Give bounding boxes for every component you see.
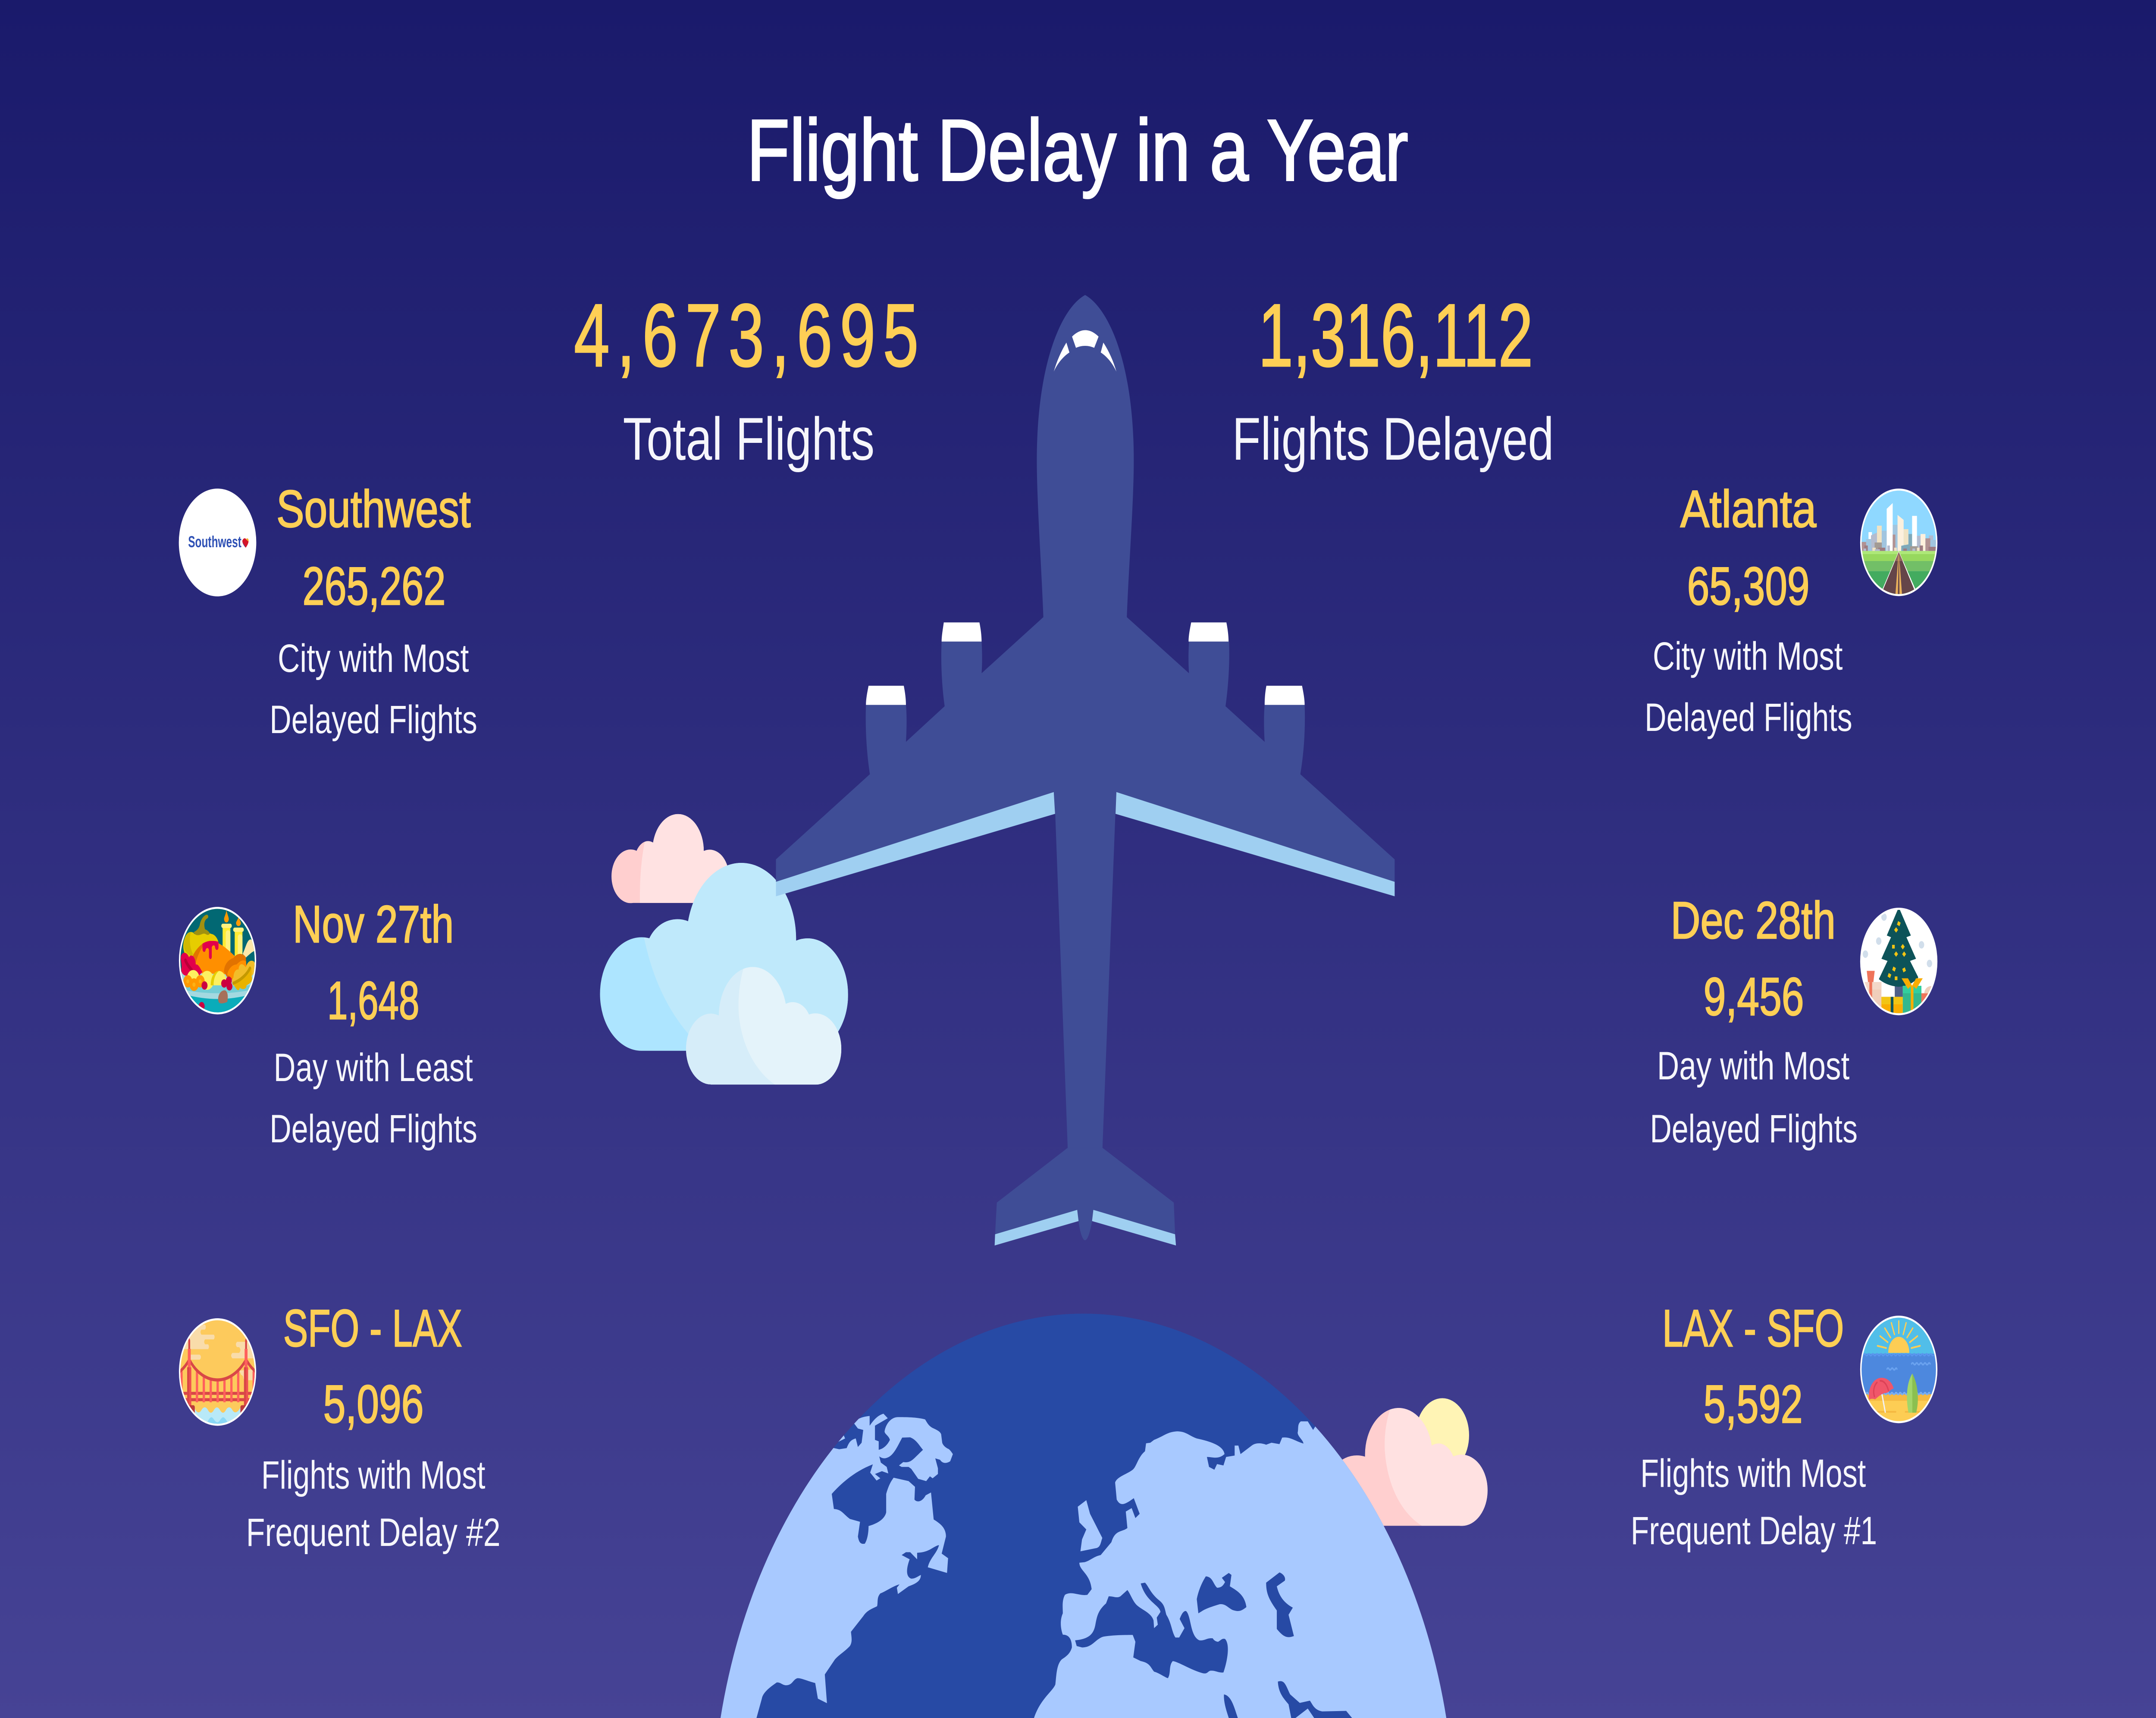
sun: [1416, 1398, 1469, 1472]
caption: Delayed Flights: [1650, 1106, 1858, 1151]
number: flights delayed: 1,316,112: [1258, 286, 1533, 386]
seas: [1075, 1572, 1352, 1718]
value: 65,309: [1687, 556, 1809, 616]
icon: city skyline and road: [1859, 489, 1938, 597]
cloud: pink small: [611, 814, 727, 903]
value: 5,096: [323, 1374, 423, 1434]
illustration: pink cloud and sun right: [1342, 1398, 1488, 1526]
value: 5,592: [1704, 1374, 1803, 1434]
panel: atlanta: [1645, 480, 1938, 740]
caption: Flights with Most: [261, 1452, 485, 1497]
stat: flights delayed: [1232, 286, 1554, 473]
sea: persian gulf: [1278, 1681, 1352, 1718]
sea: caspian: [1266, 1572, 1294, 1637]
icon: thanksgiving dinner: [177, 906, 259, 1018]
panel: dec 28th: [1650, 891, 1937, 1151]
illustration: globe: [721, 1314, 1446, 1718]
caption: Delayed Flights: [1645, 695, 1852, 740]
value: 1,648: [327, 970, 419, 1030]
land: arctic island: [789, 1431, 845, 1448]
cloud: pink right: [1342, 1408, 1488, 1526]
illustration: clouds left: [593, 809, 854, 1086]
icon: beach: [1859, 1315, 1938, 1424]
heading: SFO - LAX: [283, 1299, 462, 1357]
airplane body: [776, 295, 1395, 1240]
icon: golden gate bridge: [177, 1318, 259, 1427]
heading: Atlanta: [1680, 480, 1817, 538]
icon: southwest logo: Southwest: [188, 533, 241, 551]
number: total flights: 4,673,695: [574, 286, 918, 386]
sea: red sea: [1224, 1694, 1238, 1718]
cloud: large blue: [593, 860, 854, 1053]
label: total flights: Total Flights: [623, 405, 874, 473]
cloud: small pale: [682, 963, 844, 1086]
cockpit windows: [1054, 330, 1116, 372]
panel: sfo to lax: [177, 1299, 501, 1555]
caption: City with Most: [278, 636, 469, 680]
ocean: [756, 1314, 1384, 1718]
label: flights delayed: Flights Delayed: [1232, 405, 1554, 473]
land: eurasia and africa: [1034, 1414, 1589, 1718]
panel: nov 27th: [177, 895, 477, 1151]
title: Flight Delay in a Year: [747, 102, 1408, 199]
heading: LAX - SFO: [1662, 1299, 1844, 1357]
caption: Delayed Flights: [270, 697, 477, 742]
land: britain: [1078, 1500, 1102, 1552]
illustration: airplane: [776, 295, 1395, 1245]
heading: Southwest: [276, 480, 471, 538]
caption: Day with Most: [1657, 1043, 1849, 1088]
heading: Nov 27th: [293, 895, 454, 953]
panel: southwest: [179, 480, 477, 742]
caption: Day with Least: [274, 1045, 473, 1090]
caption: Frequent Delay #1: [1631, 1508, 1877, 1553]
continents: [721, 1414, 1446, 1718]
engine caps: [866, 622, 1305, 705]
panel: lax to sfo: [1631, 1299, 1938, 1553]
caption: Delayed Flights: [270, 1106, 477, 1151]
caption: Flights with Most: [1640, 1451, 1866, 1495]
icon: southwest logo: [179, 489, 256, 596]
sea: black sea: [1197, 1573, 1247, 1613]
sea: mediterranean: [1075, 1583, 1228, 1678]
land: north america and greenland: [682, 1414, 953, 1718]
value: 265,262: [302, 556, 445, 616]
icon: christmas tree: [1860, 908, 1937, 1016]
value: 9,456: [1704, 966, 1804, 1026]
stat: total flights: [574, 286, 918, 473]
heading: Dec 28th: [1671, 891, 1836, 950]
wing and tail edges: [776, 792, 1395, 1245]
caption: Frequent Delay #2: [246, 1510, 501, 1555]
caption: City with Most: [1653, 633, 1843, 678]
